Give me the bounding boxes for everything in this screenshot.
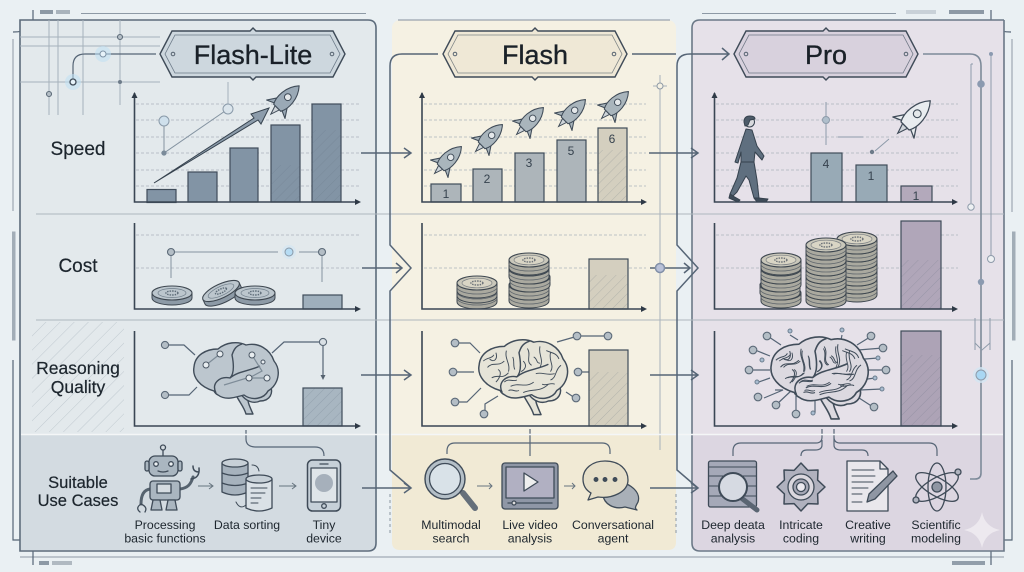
heading plaque: Pro: Pro	[805, 40, 847, 70]
label: intricate coding: coding	[783, 532, 819, 546]
speed chart: 4	[823, 157, 830, 171]
row label: Suitable Use Cases: Use Cases	[38, 492, 118, 510]
panel: Pro	[692, 20, 1004, 551]
cost chart	[422, 223, 647, 312]
row dividers	[21, 214, 1004, 434]
arrow: Flash to Pro gutter	[632, 48, 729, 493]
icon: chat bubbles	[583, 461, 639, 510]
heading plaque: Flash: Flash	[502, 40, 568, 70]
row label: Reasoning Quality: Reasoning	[36, 358, 120, 378]
panel background	[692, 20, 1004, 551]
icon: sparkle	[964, 512, 1000, 548]
icon: robot	[138, 445, 199, 512]
label: multimodal search: Multimodal	[421, 518, 481, 532]
label: intricate coding: Intricate	[779, 518, 823, 532]
speed chart: 2	[484, 172, 491, 186]
label: processing basic functions: basic functions	[124, 532, 206, 546]
icon: magnifier	[425, 459, 475, 508]
row label: Reasoning Quality: Quality	[51, 377, 105, 397]
label: conversational agent: Conversational	[572, 518, 654, 532]
use case band	[693, 435, 1003, 550]
row label: Speed: Speed	[51, 139, 105, 160]
node on cost arrow	[656, 264, 664, 272]
arrow: Flash-Lite to Flash gutter	[361, 54, 438, 493]
label: deep data analysis: analysis	[711, 532, 755, 546]
panel: Flash	[390, 20, 676, 550]
label: deep data analysis: Deep deata	[701, 518, 765, 532]
cost chart	[714, 221, 958, 312]
connector to use cases	[246, 430, 324, 456]
cost chart	[134, 223, 361, 312]
speed chart	[132, 77, 361, 205]
hatch behind row label	[32, 322, 124, 432]
icon: deep data analysis	[708, 461, 757, 510]
label: processing basic functions: Processing	[135, 518, 196, 532]
speed chart	[712, 90, 958, 205]
icon: intricate coding gear	[777, 463, 825, 511]
row label: Cost: Cost	[58, 256, 98, 277]
small arrows	[477, 483, 575, 489]
panel: Flash-Lite	[20, 20, 376, 551]
heading plaque: Flash-Lite	[160, 28, 345, 80]
right circuit connectors	[923, 52, 994, 479]
label: tiny device: Tiny	[313, 518, 336, 532]
row label: Suitable Use Cases: Suitable	[48, 474, 108, 492]
speed chart: 6	[609, 132, 616, 146]
icon: creative writing document	[847, 461, 897, 511]
icon: scientific modeling atom	[912, 463, 962, 511]
use case band	[21, 434, 375, 550]
label: multimodal search: search	[433, 532, 470, 546]
speed chart	[419, 75, 667, 450]
label: scientific modeling: modeling	[911, 532, 961, 546]
figure: walking man	[729, 116, 768, 202]
speed chart: 3	[526, 156, 533, 170]
connector to use cases	[447, 429, 610, 456]
speed chart: 1	[443, 187, 450, 201]
connectors to use cases	[733, 429, 937, 456]
label: creative writing: Creative	[845, 518, 891, 532]
reasoning chart	[714, 328, 958, 429]
speed chart: 5	[568, 144, 575, 158]
circuit decoration	[20, 20, 228, 115]
speed chart: 1	[913, 189, 920, 203]
label: scientific modeling: Scientific	[911, 518, 961, 532]
heading plaque: Flash-Lite: Flash-Lite	[194, 40, 312, 70]
panel background	[20, 20, 376, 551]
icon: tiny device	[308, 460, 340, 511]
small arrow	[198, 483, 296, 489]
icon: databases	[222, 459, 272, 511]
reasoning chart	[134, 331, 361, 429]
label: live video analysis: analysis	[508, 532, 552, 546]
icon: live video	[502, 463, 558, 509]
use case band	[392, 435, 676, 550]
label: creative writing: writing	[849, 532, 886, 546]
label: live video analysis: Live video	[502, 518, 558, 532]
heading plaque: Pro	[734, 28, 918, 80]
heading plaque: Flash	[443, 28, 627, 80]
panel background	[392, 20, 676, 550]
label: conversational agent: agent	[598, 532, 629, 546]
speed chart: 1	[868, 169, 875, 183]
reasoning chart	[422, 331, 647, 429]
label: data sorting: Data sorting	[214, 518, 280, 532]
label: tiny device: device	[306, 532, 342, 546]
